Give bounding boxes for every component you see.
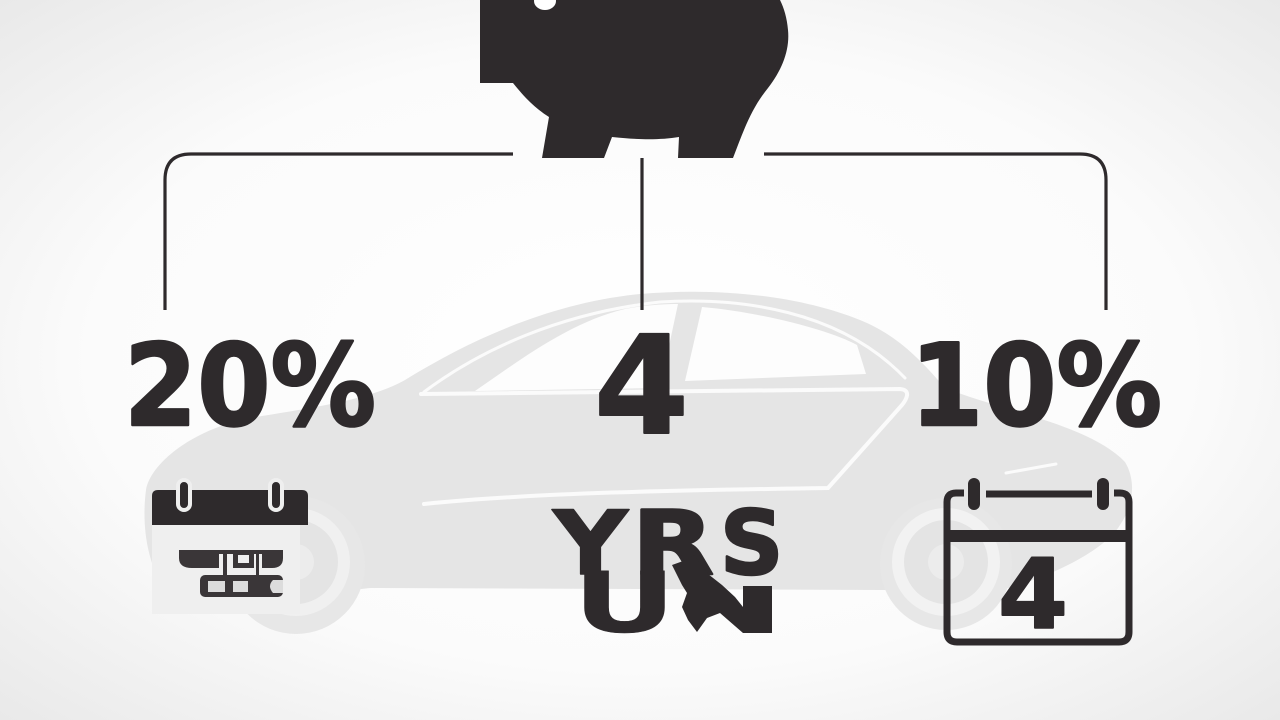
figure: 20 percent: 20% [124, 320, 376, 452]
letter S: S [720, 492, 783, 595]
piggy eye [534, 0, 556, 10]
calendar garbled number glyphs [179, 550, 283, 597]
calendar number: 4 [998, 539, 1068, 651]
figure: 10 percent: 10% [910, 320, 1162, 452]
right connector [764, 154, 1106, 310]
letter R: R [632, 492, 714, 595]
calendar rings [968, 478, 980, 510]
car highlight lines [421, 301, 1056, 504]
calendar rule [945, 530, 1132, 542]
car windows [475, 304, 678, 391]
background car silhouette [144, 292, 1132, 634]
piggy bank icon [480, 0, 788, 158]
car body [144, 292, 1132, 596]
icon: filled calendar [152, 480, 308, 614]
connector lines [165, 154, 1106, 310]
overlapping U: U [573, 554, 676, 652]
icon: outlined calendar with 4 [945, 478, 1132, 651]
calendar header [152, 490, 308, 525]
car rear wheel [880, 498, 1012, 630]
figure: 4: 4 [594, 308, 689, 466]
calendar page [152, 525, 300, 614]
overlapping wrench-shaped N [672, 555, 772, 633]
letter Y: Y [552, 492, 629, 595]
calendar rings [178, 480, 282, 510]
centre connector [640, 158, 644, 310]
car front wheel [227, 496, 365, 634]
label: YRS with overlapping letters [552, 492, 783, 652]
left connector [165, 154, 513, 310]
